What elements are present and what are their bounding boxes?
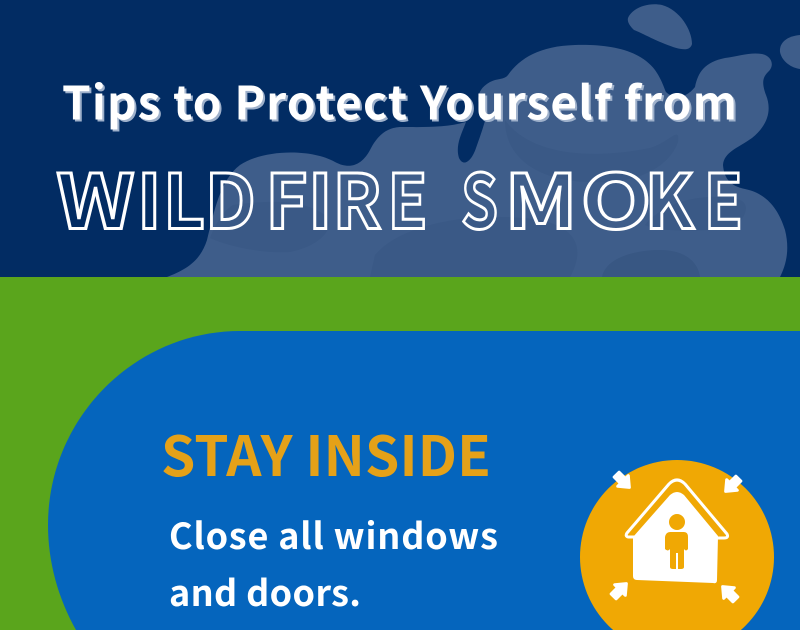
smoke illustration xyxy=(167,4,800,277)
title: tips to protect yourself from: Tips to Protect Yourself from xyxy=(64,70,739,136)
icon: roof outline xyxy=(626,480,728,538)
title: wildfire smoke outlined: O xyxy=(580,142,652,250)
icon: person xyxy=(665,514,688,569)
blue panel xyxy=(48,331,800,630)
title: tips to protect yourself from: Tips to Protect Yourself from xyxy=(62,68,737,134)
icon: inward arrows xyxy=(608,469,744,605)
title: wildfire smoke outlined: I xyxy=(137,142,162,250)
title: wildfire smoke outlined: I xyxy=(308,142,332,250)
header panel xyxy=(0,0,800,277)
body text: close all windows and doors: Close all windows xyxy=(169,508,498,560)
heading: stay inside: STAY INSIDE xyxy=(161,412,491,492)
body text: close all windows and doors xyxy=(169,508,498,617)
body text: close all windows and doors: and doors. xyxy=(169,565,361,617)
title: wildfire smoke outlined: F xyxy=(266,142,308,250)
title: wildfire smoke outlined: R xyxy=(332,142,382,250)
title: wildfire smoke outlined: K xyxy=(645,142,694,250)
icon: house body xyxy=(633,492,718,583)
title: wildfire smoke outlined: D xyxy=(205,142,256,250)
icon: person inside house with arrows xyxy=(580,460,774,630)
title: wildfire smoke outlined: M xyxy=(504,142,578,250)
title: wildfire smoke outlined: L xyxy=(163,142,205,250)
title: wildfire smoke outlined: E xyxy=(388,142,428,250)
title: wildfire smoke outlined: S xyxy=(461,142,498,250)
green band xyxy=(0,277,800,630)
title: wildfire smoke outlined: E xyxy=(704,142,743,250)
title: wildfire smoke outlined: W xyxy=(56,142,134,250)
